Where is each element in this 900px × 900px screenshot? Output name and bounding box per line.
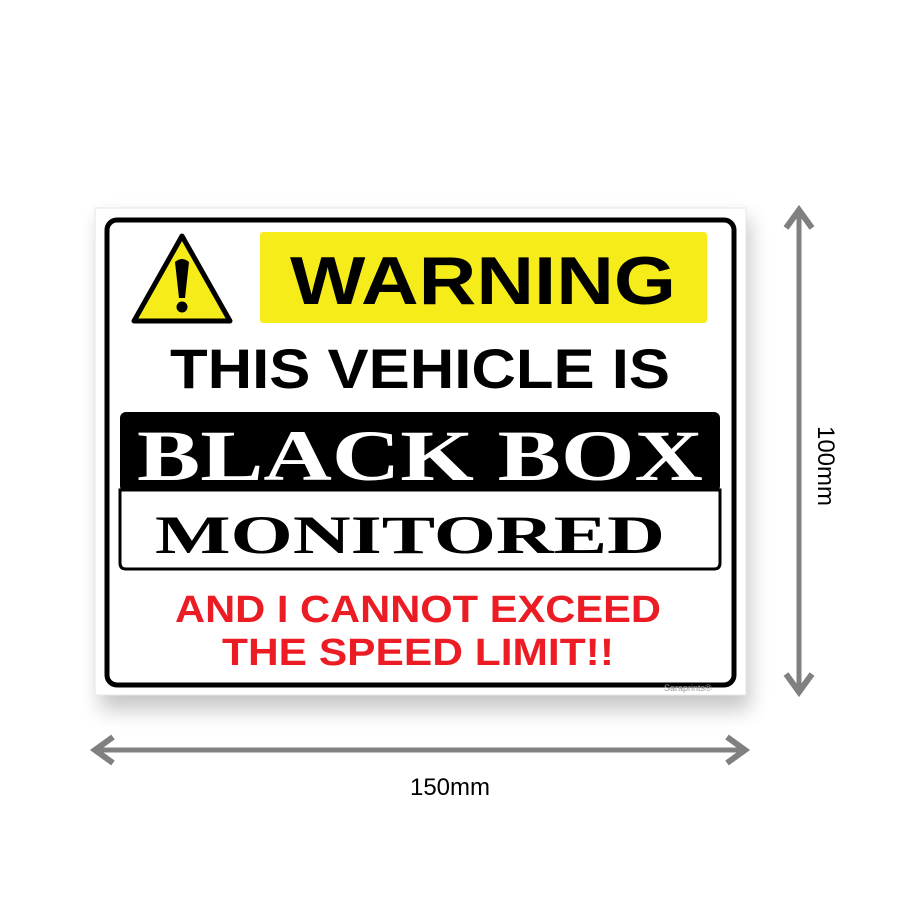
label: 100mm: 100mm xyxy=(812,426,839,506)
text: red warning lines: THE SPEED LIMIT!! xyxy=(222,632,614,674)
icon: warning triangle xyxy=(134,236,230,321)
text: red warning lines xyxy=(175,589,661,674)
sign card xyxy=(95,208,750,710)
arrow: vertical dimension xyxy=(786,210,812,692)
text: brand mark: Saraprints® xyxy=(664,683,712,693)
banner: MONITORED xyxy=(120,490,720,569)
heading: WARNING xyxy=(260,232,707,323)
heading: WARNING: WARNING xyxy=(290,243,676,319)
text: THIS VEHICLE IS: THIS VEHICLE IS xyxy=(170,337,670,400)
label: 150mm: 150mm xyxy=(410,774,490,801)
banner: MONITORED: MONITORED xyxy=(155,505,665,565)
banner: BLACK BOX: BLACK BOX xyxy=(137,416,703,496)
banner: BLACK BOX xyxy=(120,412,720,496)
arrow: horizontal dimension xyxy=(95,737,745,763)
text: red warning lines: AND I CANNOT EXCEED xyxy=(175,589,661,631)
